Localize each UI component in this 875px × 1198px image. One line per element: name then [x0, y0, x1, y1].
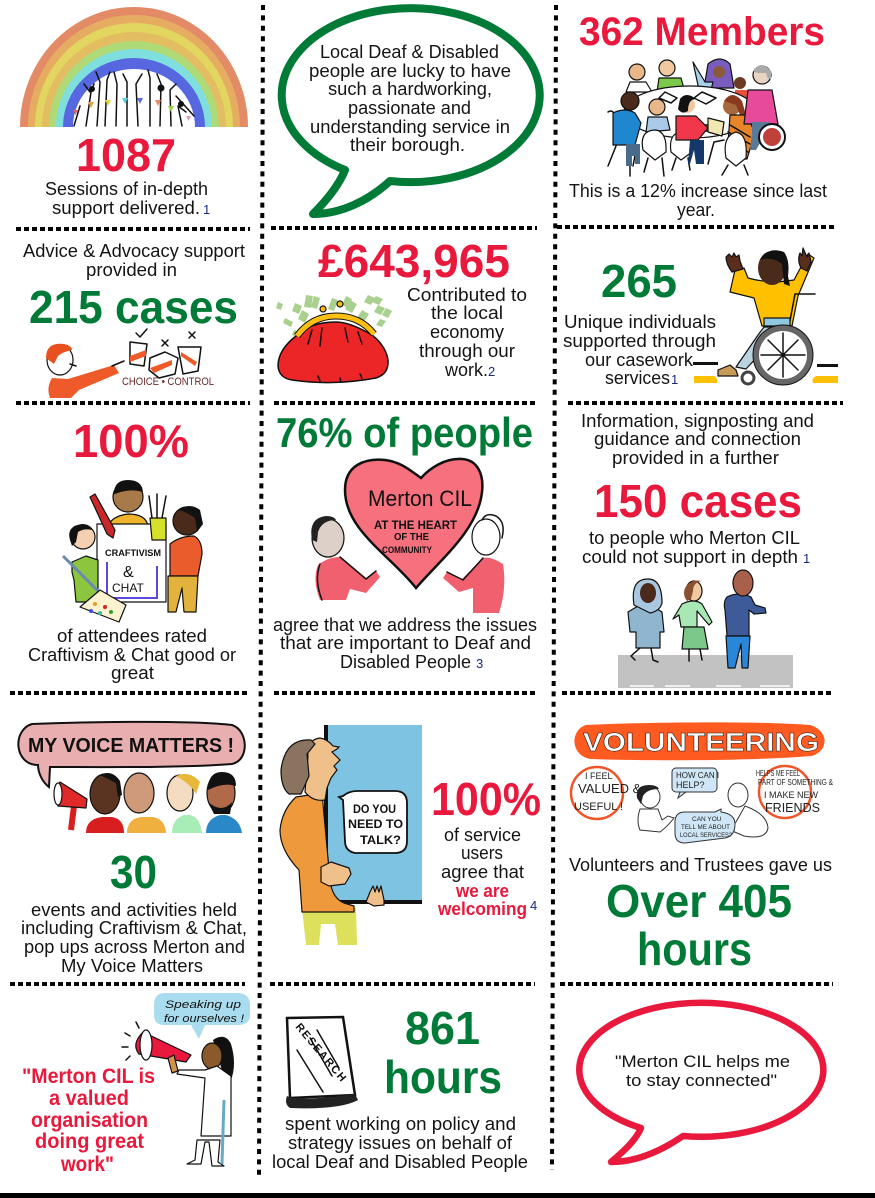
- caption: people not supported in depth: [582, 528, 810, 567]
- illustration: red purse with money: [276, 295, 392, 383]
- stat: 30: 30: [110, 846, 157, 898]
- icon: research book: [286, 1017, 358, 1108]
- illustration: woman pointing at choice and control cups: [46, 329, 214, 398]
- illustration: man in wheelchair with raised arms: [693, 248, 838, 385]
- quote text: a valued: [49, 1087, 129, 1110]
- quote text: people are lucky to have: [309, 61, 511, 81]
- caption: agree we address issues: 3: [476, 656, 483, 671]
- bubble text: speaking up for ourselves: for ourselves !: [164, 1013, 244, 1025]
- sign text: TALK?: [360, 833, 401, 847]
- caption: agree we address issues: [273, 615, 537, 672]
- quote text: work": [60, 1153, 114, 1176]
- heart lettering: Merton CIL: [368, 486, 472, 511]
- caption: events and activities: events and activities held: [31, 900, 237, 920]
- panel: volunteering: [569, 722, 834, 975]
- quote text: doing great: [35, 1130, 144, 1153]
- caption: events and activities: My Voice Matters: [61, 956, 203, 976]
- bubble text: how can I help: [676, 771, 719, 790]
- bubble text: local services: CAN YOU: [692, 816, 722, 823]
- caption: policy and strategy work: [272, 1114, 528, 1172]
- caption: volunteers and trustees: Volunteers and Trustees gave us: [569, 855, 832, 875]
- panel: green speech bubble quote: [282, 8, 540, 214]
- handwritten notes: USEFUL !: [574, 801, 623, 813]
- banner text: MY VOICE MATTERS !: [28, 735, 234, 757]
- quote text: to stay connected": [626, 1071, 777, 1090]
- stat: 861 hours: hours: [384, 1051, 502, 1103]
- quote text: "Merton CIL is: [22, 1065, 155, 1088]
- illustration: three people with Craftivism and Chat poster: [63, 480, 203, 622]
- book title: RESEARCH: [293, 1021, 348, 1084]
- bubble text: how can I help: HELP?: [676, 780, 705, 790]
- stat: over 405 hours: hours: [637, 923, 752, 975]
- caption: increase since last year: This is a 12% increase since last: [569, 181, 827, 201]
- illustration: people around a table: [608, 59, 785, 176]
- caption: service users agree: [437, 825, 537, 919]
- caption: service users agree: of service: [444, 825, 521, 845]
- caption: contributed to local economy: economy: [430, 322, 504, 342]
- caption: sessions delivered: Sessions of in-depth: [45, 179, 208, 199]
- panel: 76 percent of people: [273, 409, 537, 672]
- bubble text: how can I help: HOW CAN I: [676, 771, 719, 780]
- panel: information and signposting: [581, 411, 814, 688]
- caption: attendees rated: Craftivism & Chat good or: [28, 645, 236, 665]
- label: Craftivism and Chat: [105, 548, 161, 595]
- panel: welcoming service: [280, 725, 541, 945]
- caption: service users agree: 4: [530, 898, 537, 913]
- panel: advice and advocacy cases: [23, 241, 245, 398]
- caption: service users agree: welcoming: [437, 899, 527, 919]
- bubble text: speaking up for ourselves: Speaking up: [165, 999, 241, 1011]
- caption: policy and strategy work: local Deaf and Disabled People: [272, 1152, 528, 1172]
- stat: 1087: 1087: [76, 129, 176, 181]
- caption: sessions delivered: 1: [203, 202, 210, 217]
- illustration: my voice matters banner and faces: [18, 722, 245, 833]
- heart lettering: AT THE HEART: [374, 518, 458, 532]
- quote text: such a hardworking,: [328, 79, 492, 99]
- handwritten notes: HELPS ME FEEL: [756, 769, 800, 778]
- stat: over 405 hours: Over 405: [606, 875, 792, 927]
- caption: contributed to local economy: Contributed to: [407, 285, 527, 305]
- quote text: passionate and: [348, 98, 471, 118]
- panel: red speech bubble quote: [579, 1003, 823, 1162]
- caption: attendees rated: [28, 626, 236, 683]
- caption: agree we address issues: that are important to Deaf and: [280, 633, 531, 653]
- handwritten notes: VALUED &: [578, 781, 642, 796]
- label: Craftivism and Chat: &: [123, 564, 134, 581]
- caption: contributed to local economy: through our: [419, 341, 515, 361]
- label: choice and control: CHOICE • CONTROL: [122, 376, 214, 388]
- caption: attendees rated: of attendees rated: [57, 626, 207, 646]
- quote text: organisation: [31, 1109, 148, 1132]
- stat: over 405 hours: [606, 875, 792, 975]
- bubble text: speaking up for ourselves: [164, 999, 244, 1025]
- panel: unique individuals: [563, 248, 838, 388]
- intro text: guidance and connection: [594, 429, 801, 449]
- illustration: three people walking on road: [618, 570, 793, 688]
- stat: 100%: 100%: [431, 773, 541, 825]
- bubble text: local services: LOCAL SERVICES?: [680, 832, 732, 839]
- caption: agree we address issues: Disabled People: [340, 652, 471, 672]
- intro text: provided in: [86, 260, 177, 280]
- banner text: VOLUNTEERING: [583, 727, 819, 757]
- sign text: NEED TO: [348, 817, 403, 831]
- stat: 76% of people: 76% of people: [276, 409, 533, 456]
- caption: unique individuals supported: Unique individuals: [564, 312, 716, 332]
- caption: sessions delivered: [45, 179, 210, 218]
- panel: my voice matters events: [18, 722, 247, 976]
- quote text: their borough.: [350, 135, 465, 155]
- caption: service users agree: agree that: [441, 862, 524, 882]
- illustration: woman with megaphone: [122, 993, 250, 1166]
- illustration: heart and two people: [311, 459, 504, 613]
- caption: people not supported in depth: 1: [803, 551, 810, 566]
- intro text: provided in a further: [612, 448, 779, 468]
- intro text: [581, 411, 814, 468]
- quote text: [615, 1052, 790, 1090]
- caption: sessions delivered: support delivered.: [52, 198, 200, 218]
- heart lettering: [368, 486, 472, 555]
- caption: contributed to local economy: 2: [488, 364, 495, 379]
- stat: £643,965: £643,965: [318, 235, 510, 287]
- handwritten notes: [574, 769, 834, 815]
- bubble text: local services: [680, 816, 732, 839]
- stat: 861 hours: [384, 1002, 502, 1103]
- intro text: Advice & Advocacy support: [23, 241, 245, 261]
- panel: local economy contribution: [276, 235, 527, 383]
- handwritten notes: FRIENDS: [765, 800, 820, 815]
- caption: events and activities: including Craftivism & Chat,: [21, 918, 247, 938]
- caption: unique individuals supported: our casework: [585, 350, 694, 370]
- caption: unique individuals supported: services: [605, 368, 670, 388]
- caption: increase since last year: year.: [677, 200, 715, 220]
- stat: 265: 265: [601, 255, 677, 307]
- caption: unique individuals supported: 1: [671, 372, 678, 387]
- label: Craftivism and Chat: CRAFTIVISM: [105, 548, 161, 558]
- caption: service users agree: we are: [455, 881, 509, 901]
- quote text: [309, 42, 511, 155]
- handwritten notes: PART OF SOMETHING &: [758, 778, 834, 787]
- intro text: Information, signposting and: [581, 411, 814, 431]
- quote text: Local Deaf & Disabled: [320, 42, 499, 62]
- label: Craftivism and Chat: CHAT: [112, 581, 144, 595]
- caption: agree we address issues: agree that we address the issues: [273, 615, 537, 635]
- sign text: [348, 802, 403, 847]
- handwritten notes: I MAKE NEW: [764, 790, 818, 800]
- stat: 362 Members: 362 Members: [579, 10, 825, 54]
- icon: rainbow with raised arms: [20, 7, 248, 127]
- caption: people not supported in depth: to people who Merton CIL: [589, 528, 800, 548]
- caption: events and activities: pop ups across Merton and: [24, 937, 245, 957]
- panel: members: [569, 10, 827, 220]
- bubble text: local services: TELL ME ABOUT: [681, 824, 730, 831]
- caption: events and activities: [21, 900, 247, 976]
- caption: contributed to local economy: work.: [444, 360, 488, 380]
- panel: valued organisation quote: [22, 993, 250, 1176]
- caption: policy and strategy work: strategy issues on behalf of: [288, 1133, 513, 1153]
- heart lettering: COMMUNITY: [382, 545, 432, 555]
- caption: attendees rated: great: [111, 663, 154, 683]
- panel: sessions of support: [20, 7, 248, 218]
- illustration: person holding do you need to talk sign: [280, 725, 422, 945]
- quote text: understanding service in: [310, 117, 510, 137]
- caption: increase since last year: [569, 181, 827, 220]
- caption: people not supported in depth: could not support in depth: [582, 547, 798, 567]
- speech bubble: [579, 1003, 823, 1162]
- sign text: DO YOU: [353, 802, 396, 816]
- heart lettering: OF THE: [394, 532, 429, 543]
- panel: craftivism and chat: [28, 415, 236, 683]
- intro text: [23, 241, 245, 280]
- speech bubble: [282, 8, 540, 214]
- caption: contributed to local economy: [407, 285, 527, 380]
- stat: 100%: 100%: [73, 415, 189, 467]
- caption: policy and strategy work: spent working on policy and: [285, 1114, 516, 1134]
- handwritten notes: I FEEL: [585, 771, 613, 781]
- caption: unique individuals supported: [563, 312, 716, 388]
- caption: contributed to local economy: the local: [431, 303, 503, 323]
- illustration: volunteering banner and speech bubbles: [571, 722, 834, 843]
- stat: 215 cases: 215 cases: [29, 281, 238, 333]
- panel: research hours: [272, 1002, 528, 1172]
- stat: 150 cases: 150 cases: [594, 475, 802, 527]
- caption: service users agree: users: [461, 843, 503, 863]
- caption: unique individuals supported: supported through: [563, 331, 716, 351]
- quote text: [22, 1065, 155, 1176]
- quote text: "Merton CIL helps me: [615, 1052, 790, 1071]
- stat: 861 hours: 861: [405, 1002, 480, 1054]
